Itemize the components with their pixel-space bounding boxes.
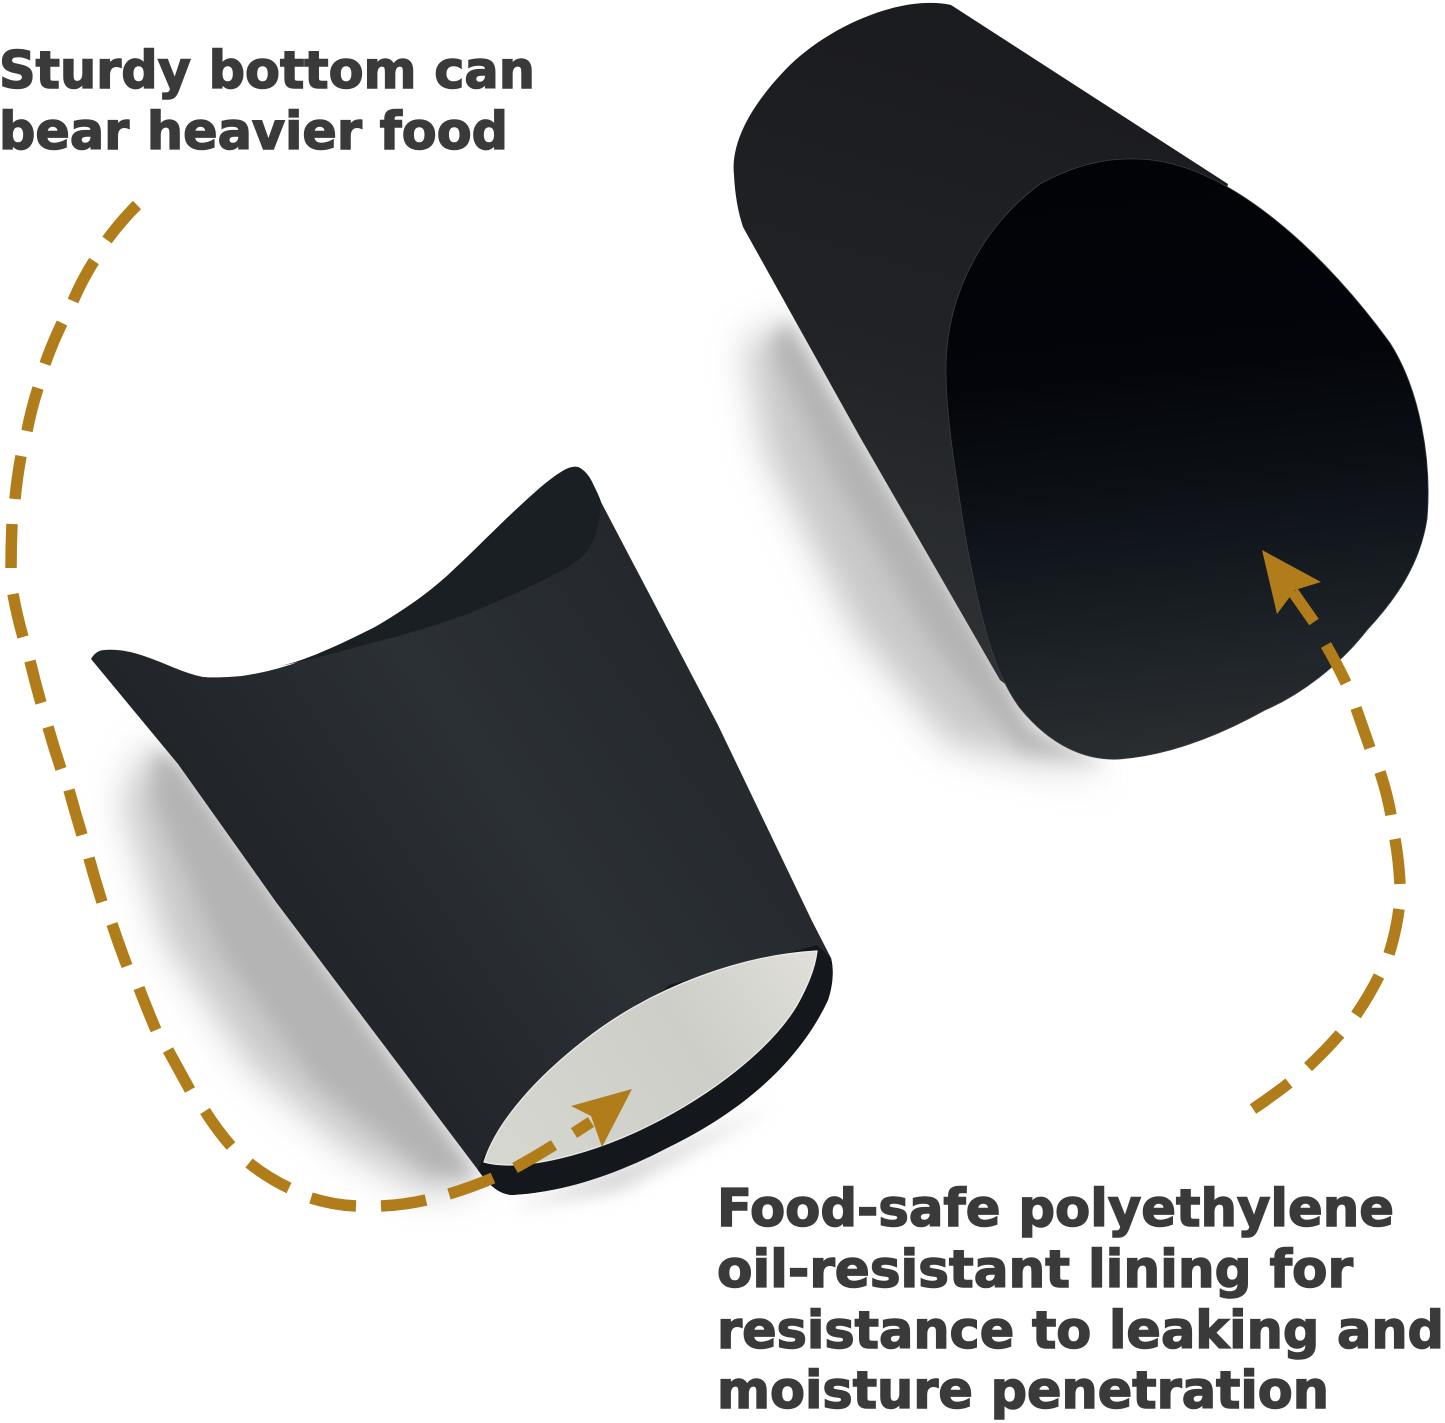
- heading: sturdy bottom: Sturdy bottom can: [0, 41, 535, 101]
- heading: sturdy bottom: bear heavier food: [0, 102, 508, 162]
- arrowhead: [571, 1089, 632, 1147]
- cup body: [91, 467, 833, 1195]
- text: polyethylene lining: Food-safe polyethylene: [717, 1179, 1394, 1239]
- arrow: right dashed curve to lining: [1253, 550, 1400, 1109]
- heading: sturdy bottom: [0, 41, 535, 162]
- text: polyethylene lining: moisture penetration: [717, 1361, 1329, 1421]
- arrowhead: [1262, 550, 1321, 614]
- cup: top right open cup: [734, 3, 1428, 759]
- cup shadows: [122, 318, 1110, 1208]
- cup: bottom left cup: [91, 467, 833, 1195]
- cup inner back wall: [276, 467, 601, 667]
- cup opening: [946, 159, 1428, 759]
- text: polyethylene lining: resistance to leaking and: [717, 1301, 1444, 1361]
- cup white base: [484, 951, 817, 1165]
- cup base rim: [478, 945, 833, 1195]
- arrow: left dashed curve to base: [11, 205, 632, 1206]
- text: polyethylene lining: [717, 1179, 1444, 1421]
- cup body: [734, 3, 1228, 750]
- text: polyethylene lining: oil-resistant lining for: [717, 1240, 1354, 1300]
